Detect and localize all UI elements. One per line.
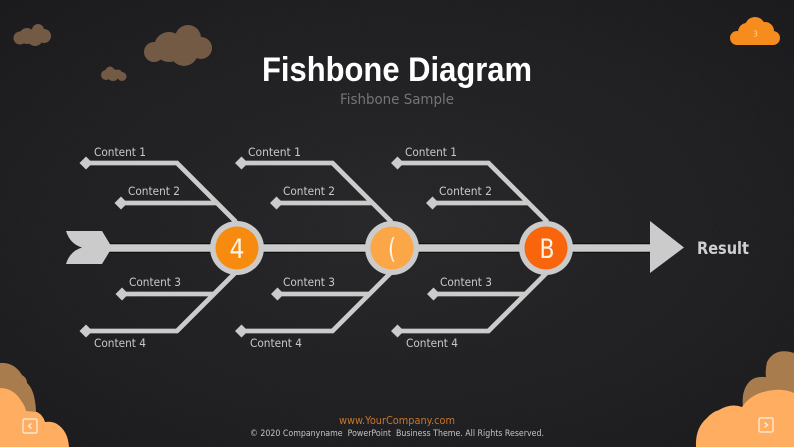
fishbone group 1: Content 3 [129, 275, 181, 289]
next button [759, 418, 773, 432]
arrow tail [66, 231, 112, 264]
title: Fishbone Diagram [262, 51, 532, 89]
node 4: 4 [230, 234, 244, 265]
fishbone group 2: Content 2 [283, 184, 335, 198]
icon: cloud top centre [144, 25, 212, 66]
fishbone group 1: Content 1 [94, 145, 146, 159]
node ( [365, 221, 419, 275]
icon: cloud top left [14, 24, 51, 46]
result label: Result [697, 239, 749, 258]
page number: 3 [753, 30, 758, 38]
fishbone group 1 [80, 145, 236, 350]
fishbone group 3: Content 4 [406, 336, 458, 350]
fishbone group 2: Content 1 [248, 145, 301, 159]
fishbone group 3 [391, 145, 548, 350]
fishbone group 2: Content 3 [283, 275, 335, 289]
arrow head [650, 221, 684, 273]
node B [519, 221, 573, 275]
fishbone group 1: Content 2 [128, 184, 180, 198]
previous button [23, 419, 37, 433]
node B: B [540, 234, 554, 265]
copyright: © 2020 Companyname PowerPoint Business Theme. All Rights Reserved. [250, 429, 544, 439]
node 4 [210, 221, 264, 275]
cloud bottom left [0, 363, 69, 447]
node (: ( [388, 232, 396, 265]
fishbone group 3: Content 3 [440, 275, 492, 289]
icon: cloud small [101, 66, 126, 81]
fishbone group 1: Content 4 [94, 336, 146, 350]
fishbone group 2: Content 4 [250, 336, 302, 350]
fishbone group 3: Content 1 [405, 145, 457, 159]
website: www.YourCompany.com [339, 415, 455, 427]
fishbone group 3: Content 2 [439, 184, 492, 198]
subtitle: Fishbone Sample [340, 92, 454, 108]
main spine arrow [66, 221, 684, 273]
cloud bottom right [696, 351, 794, 447]
icon: page number cloud [730, 17, 780, 45]
fishbone group 2 [235, 145, 392, 350]
